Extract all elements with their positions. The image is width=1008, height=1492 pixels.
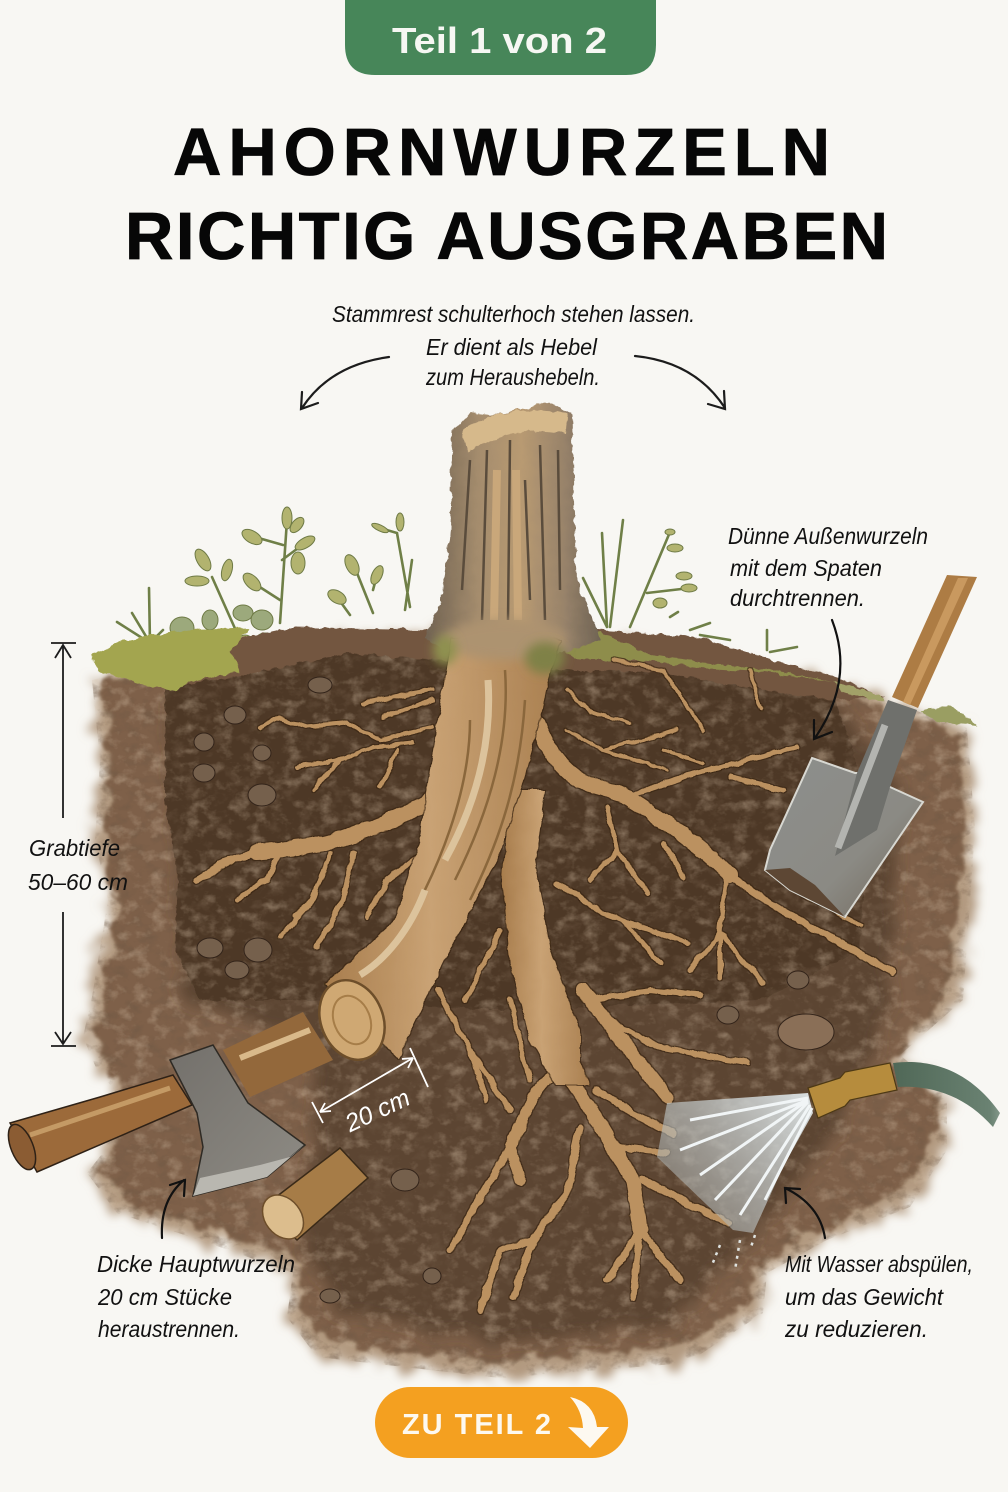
callout: outer roots: mit dem Spaten [730, 555, 882, 581]
dark pit wall with sharp left edge [165, 650, 870, 1010]
callout: rinse: zu reduzieren. [784, 1316, 928, 1342]
growth rings [326, 990, 378, 1050]
left upper branches [260, 690, 433, 790]
arrow: stump right [635, 356, 725, 409]
tap root [502, 790, 590, 1085]
button: to part 2: ZU TEIL 2 [402, 1409, 551, 1441]
callout: main roots [97, 1251, 295, 1342]
darker lower soil [170, 650, 900, 1345]
callout: stump: Er dient als Hebel [426, 334, 598, 360]
title: RICHTIG AUSGRABEN [125, 199, 888, 274]
moss at trunk base left [433, 635, 457, 665]
soil cross-section [80, 620, 990, 1390]
callout: main roots: heraustrennen. [98, 1316, 240, 1342]
arrow: stump left [301, 357, 389, 409]
brass nozzle [808, 1063, 897, 1118]
axe head [170, 1045, 305, 1196]
arrow: rinse [785, 1188, 825, 1238]
badge: part 1 of 2 [345, 0, 656, 75]
dimension: digging depth: Grabtiefe [29, 835, 120, 861]
button: to part 2 [375, 1387, 628, 1458]
upper handle log [223, 1012, 333, 1097]
mid brown soil [97, 635, 965, 1362]
small log [263, 1148, 368, 1240]
tree stump [425, 402, 600, 665]
stump to root blend [443, 620, 567, 660]
axe handle [10, 1075, 192, 1172]
thin and medium roots [196, 660, 893, 1310]
callout: rinse [784, 1251, 973, 1342]
arrow: outer roots [814, 620, 840, 739]
callout: main roots: 20 cm Stücke [97, 1284, 232, 1310]
badge: part 1 of 2: Teil 1 von 2 [392, 20, 607, 61]
callout: rinse: Mit Wasser abspülen, [785, 1251, 973, 1277]
middle thin roots [437, 930, 530, 1110]
icon: arrow down [568, 1397, 609, 1448]
soil surface crust and moss [90, 627, 978, 726]
moss at trunk base right [525, 642, 565, 674]
shovel [765, 575, 977, 917]
title [125, 115, 888, 274]
hose [893, 1062, 1000, 1127]
dimension: digging depth: 50–60 cm [28, 869, 128, 895]
title: AHORNWURZELN [173, 115, 830, 190]
pale soil fringe [83, 630, 975, 1378]
callout: outer roots: durchtrennen. [730, 585, 865, 611]
left main root [257, 795, 437, 852]
plants and grass [117, 507, 797, 652]
callout: outer roots [728, 523, 928, 611]
dimension: 20 cm: 20 cm [340, 1084, 414, 1138]
water spray [657, 1093, 813, 1233]
arrow: main roots [162, 1180, 185, 1238]
cut main root [308, 620, 567, 1070]
callout: outer roots: Dünne Außenwurzeln [728, 523, 928, 549]
tap root lower branches [510, 1063, 560, 1180]
soil grain texture [80, 620, 990, 1390]
right main root [537, 723, 730, 875]
cut face [308, 970, 396, 1070]
callout: main roots: Dicke Hauptwurzeln [97, 1251, 295, 1277]
stones [193, 677, 834, 1303]
hose with water spray [657, 1062, 1000, 1270]
callout: stump: zum Heraushebeln. [425, 364, 600, 390]
callout: stump [332, 301, 695, 390]
axe [3, 1012, 368, 1247]
dimension: 20 cm [312, 1048, 428, 1138]
callout: stump: Stammrest schulterhoch stehen lassen. [332, 301, 695, 327]
callout: rinse: um das Gewicht [785, 1284, 945, 1310]
dimension: digging depth [28, 643, 128, 1046]
